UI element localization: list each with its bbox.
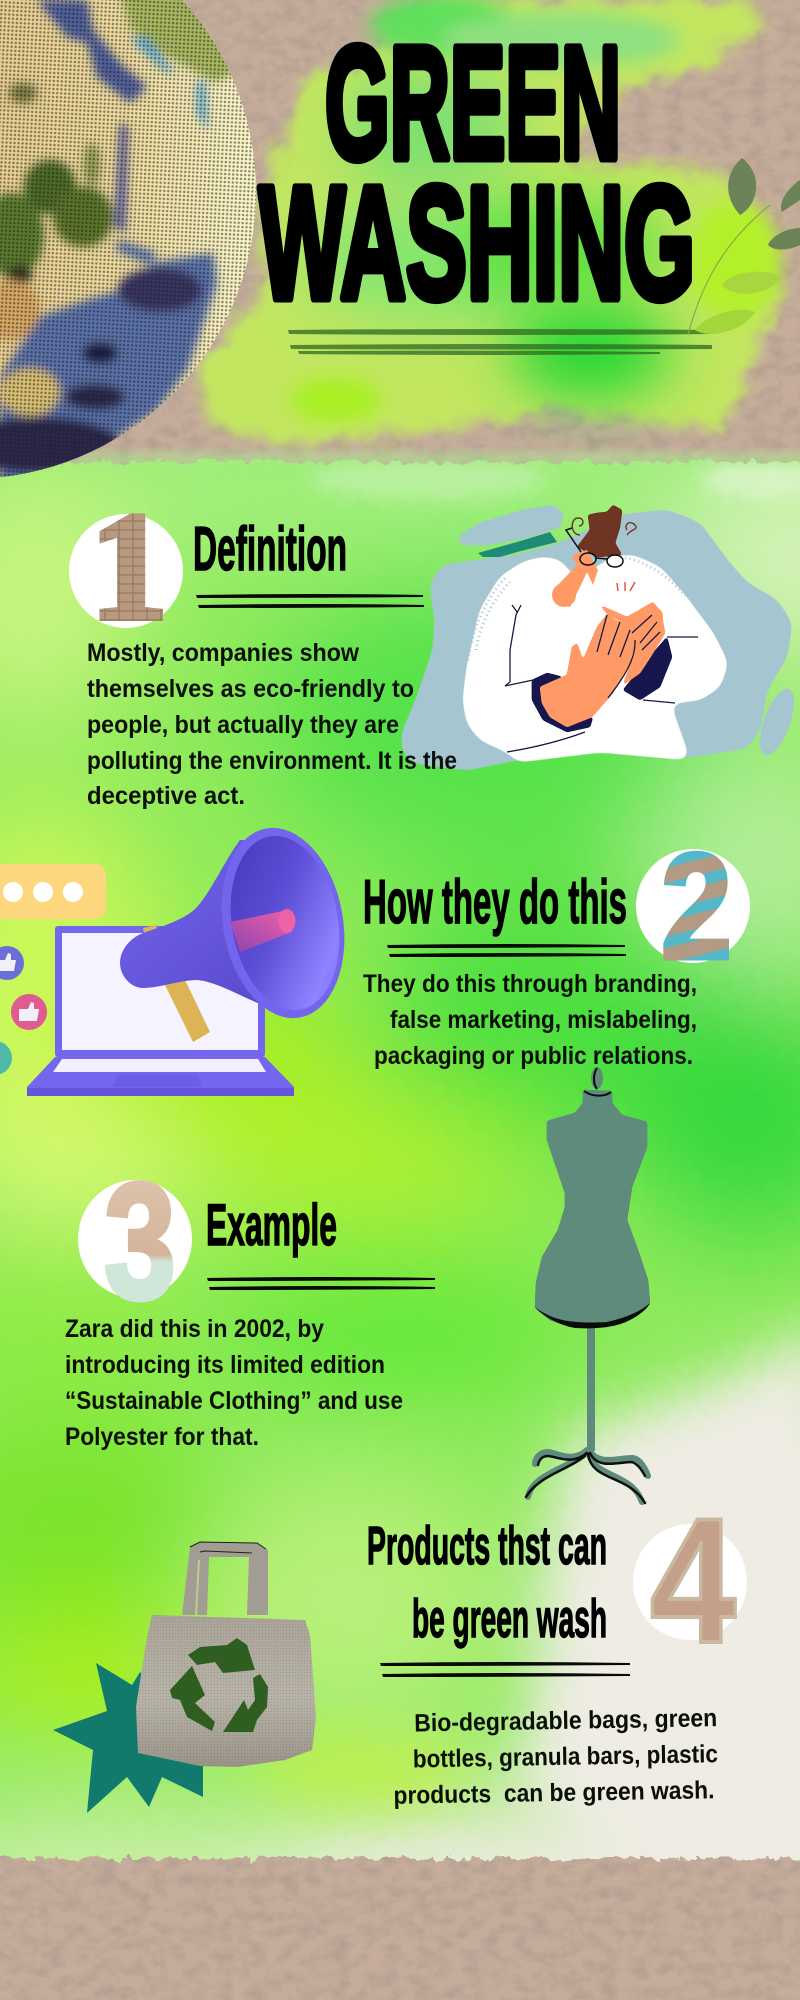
megaphone [120,818,359,1042]
section 1: definition [69,482,457,810]
cuffs [623,637,672,700]
hair [577,505,622,557]
outlines [505,605,698,752]
illustration: dress mannequin [526,1067,650,1503]
like icons [0,946,47,1075]
stand legs [526,1450,648,1503]
illustration: recycled tote bag [53,1542,316,1813]
icon: leaves top right [688,158,800,335]
hands [600,602,665,685]
section 4: products [367,1481,747,1810]
title [259,13,695,332]
heading: products: be green wash [412,1589,607,1649]
illustration: earth globe halftone [0,0,260,500]
number badge 4: 4 [650,1481,736,1680]
section 3: example [65,1149,435,1451]
underline: how [387,944,626,957]
red clap marks [617,582,635,591]
bag handles [182,1542,268,1615]
shirt speckles [468,558,685,660]
number badge 1 [69,482,183,652]
text: products body: Bio-degradable bags, green [414,1704,717,1737]
text: products body: products can be green wash. [393,1776,715,1810]
face [552,550,598,607]
text: example body: Polyester for that. [65,1423,259,1451]
text: definition body: themselves as eco-friendly to [87,675,414,703]
neck and knob [584,1067,611,1096]
background: main green watercolor area [0,440,800,1990]
bag body [136,1615,316,1767]
illustration: clapping person [402,505,800,770]
laptop [27,926,294,1096]
glasses [566,528,623,567]
dress form [535,1090,650,1327]
number badge 3: 3 [104,1149,176,1333]
teal star [53,1663,203,1813]
section 2: how they do this [363,822,750,1070]
text: example body [65,1315,403,1451]
text: example body: Zara did this in 2002, by [65,1315,324,1343]
blob backdrop [402,505,800,770]
text: products body: bottles, granula bars, plastic [413,1740,718,1773]
text: how body: false marketing, mislabeling, [390,1006,697,1034]
underline: example [207,1277,435,1290]
number badge 1: 1 [90,482,168,652]
title underline [288,329,712,355]
text: definition body: people, but actually they are [87,711,399,739]
text: example body: introducing its limited edition [65,1351,385,1379]
black hem [535,1303,650,1328]
text: how body: They do this through branding, [363,970,697,998]
recycle symbol [170,1638,268,1732]
background: soft upper edge of green area [0,452,800,466]
text: how body [363,970,697,1070]
chat bubble [0,864,106,919]
stand pole [587,1325,595,1451]
text: definition body [87,639,457,810]
background: top green watercolor splash [195,0,780,445]
text: how body: packaging or public relations. [374,1042,693,1070]
teal ribbon [478,532,557,557]
heading: example: Example [206,1193,337,1258]
heading: definition: Definition [193,515,347,584]
underline: definition [196,594,424,608]
text: definition body: Mostly, companies show [87,639,360,667]
underline: products [380,1662,630,1677]
text: products body [392,1704,719,1810]
illustration: laptop with megaphone [0,818,359,1096]
text: definition body: deceptive act. [87,782,245,810]
text: example body: “Sustainable Clothing” and use [65,1387,403,1415]
text: definition body: polluting the environment. It is the [87,747,457,775]
heading: products [367,1516,607,1649]
number badge 2: 2 [661,822,732,990]
white shirt [463,555,728,762]
